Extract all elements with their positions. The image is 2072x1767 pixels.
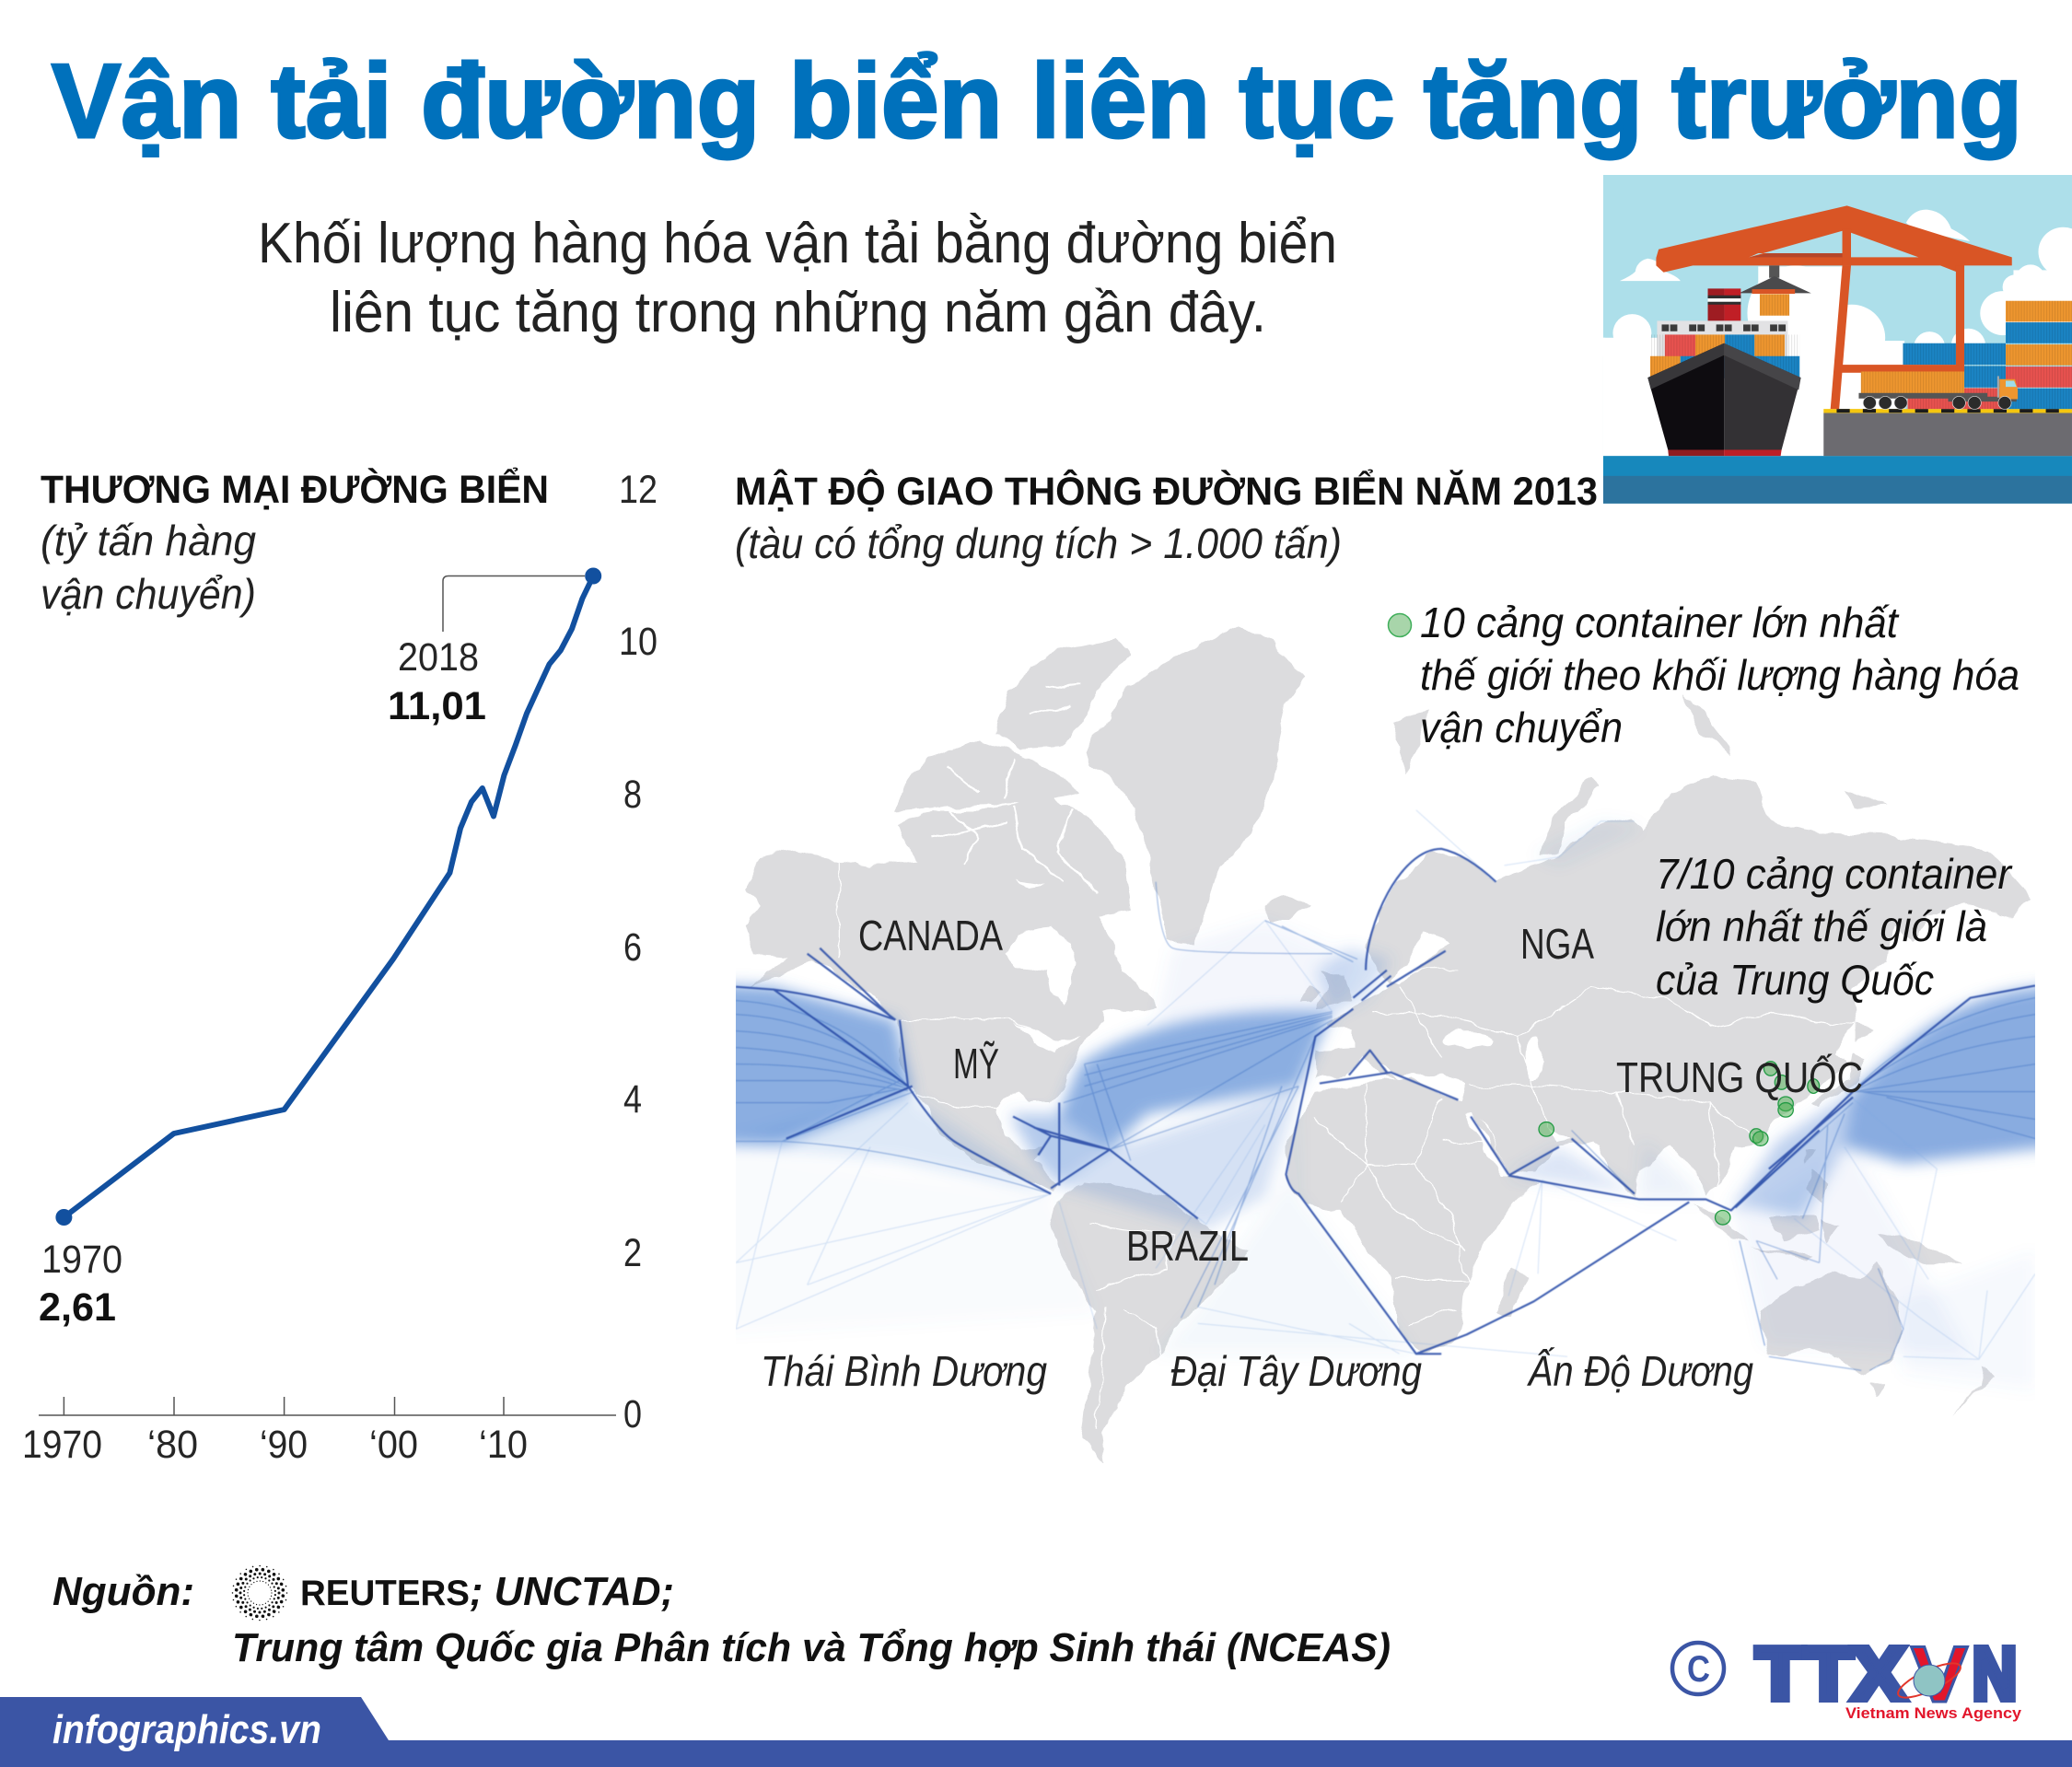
logo: TTXVN: V: [1911, 1631, 1968, 1719]
callout: China ports: lớn nhất thế giới là: [1656, 902, 1987, 950]
country labels: NGA: [1520, 920, 1594, 968]
icon: copyright: C: [1687, 1649, 1710, 1690]
y axis labels: 0: [623, 1392, 642, 1436]
callout: China ports: của Trung Quốc: [1656, 956, 1934, 1004]
subtitle: Khối lượng hàng hóa vận tải bằng đường biển: [258, 212, 1337, 275]
legend: top 10 ports: [1389, 599, 2020, 751]
source: ; UNCTAD;: [470, 1569, 674, 1614]
y axis labels: 12: [619, 468, 658, 512]
heading: sea trade chart: THƯƠNG MẠI ĐƯỜNG BIỂN: [41, 467, 549, 512]
legend: top 10 ports: thế giới theo khối lượng hàng hóa: [1420, 651, 2020, 699]
y axis labels: 10: [619, 620, 658, 664]
x axis labels: ‘00: [369, 1423, 418, 1467]
endpoint markers: [55, 567, 601, 1226]
y axis labels: 8: [623, 773, 642, 817]
x axis labels: ‘90: [260, 1423, 308, 1467]
x axis labels: 1970: [22, 1423, 102, 1467]
ship: [1647, 288, 1801, 456]
subtitle: [258, 212, 1337, 344]
chart subtitle: [41, 517, 256, 618]
ocean labels: Đại Tây Dương: [1170, 1347, 1422, 1395]
legend: top 10 ports: 10 cảng container lớn nhất: [1420, 599, 1900, 646]
legend: top 10 ports: vận chuyển: [1420, 703, 1623, 751]
label 1970: 1970: [41, 1238, 122, 1282]
footer site label: infographics.vn: [52, 1707, 321, 1752]
world map with shipping routes: [711, 625, 2055, 1464]
ocean labels: Thái Bình Dương: [761, 1347, 1047, 1395]
logo: TTXVN: TTX: [1756, 1633, 1905, 1715]
title: Vận tải đường biển liên tục tăng trưởng: [52, 43, 2022, 160]
pale routes: [736, 810, 2035, 1359]
density fans: [711, 821, 2055, 1389]
y axis labels: 4: [623, 1077, 642, 1122]
x axis labels: [22, 1423, 528, 1467]
icon: copyright: [1672, 1643, 1724, 1694]
source: Trung tâm Quốc gia Phân tích và Tổng hợp Sinh thái (NCEAS): [232, 1625, 1391, 1670]
source: [52, 1565, 1391, 1670]
logo: TTXVN: N: [1973, 1633, 2017, 1715]
label 2018: 11,01: [388, 684, 486, 728]
label 2018: [388, 635, 486, 728]
inland water: [1005, 926, 1572, 1174]
subtitle: liên tục tăng trong những năm gần đây.: [330, 281, 1266, 344]
country labels: [858, 912, 1863, 1270]
shipping routes: [736, 810, 2035, 1370]
leader line 2018: [443, 576, 585, 632]
country labels: CANADA: [858, 912, 1003, 959]
data line: [64, 576, 593, 1217]
container stacks: [1903, 301, 2072, 409]
chart subtitle: (tỷ tấn hàng: [41, 517, 256, 564]
callout: China ports: 7/10 cảng container: [1656, 850, 2013, 898]
x axis: [39, 1397, 616, 1415]
logo: TTXVN: Vietnam News Agency: [1845, 1704, 2022, 1722]
logo: TTXVN: [1672, 1631, 2022, 1722]
map subtitle: (tàu có tổng dung tích > 1.000 tấn): [735, 519, 1342, 567]
ocean labels: [761, 1347, 1753, 1395]
source: Nguồn:: [52, 1569, 194, 1614]
x axis labels: ‘10: [479, 1423, 528, 1467]
source: REUTERS: [300, 1574, 470, 1613]
callout: China ports: [1656, 850, 2013, 1004]
crane spreader and hanging container: [1739, 265, 1811, 316]
ocean labels: Ấn Độ Dương: [1526, 1347, 1753, 1395]
label 1970: [39, 1238, 122, 1330]
truck: [1858, 371, 2018, 409]
heading: shipping density map: MẬT ĐỘ GIAO THÔNG ĐƯỜNG BIỂN NĂM 2013: [735, 469, 1598, 514]
label 1970: 2,61: [39, 1285, 116, 1330]
label 2018: 2018: [398, 635, 479, 680]
medium routes: [736, 882, 2035, 1370]
icon: reuters logo: [232, 1565, 287, 1621]
main routes: [736, 849, 2035, 1354]
ports: top 10 container ports: [1539, 1062, 1820, 1225]
x axis labels: ‘80: [147, 1423, 198, 1467]
y axis labels: [619, 468, 658, 1436]
land masses: [744, 625, 2033, 1464]
y axis labels: 2: [623, 1231, 642, 1275]
arctic channels: [929, 683, 1097, 893]
chart subtitle: vận chuyển): [41, 570, 256, 618]
line chart: [22, 468, 658, 1467]
footer band: [0, 1697, 2072, 1767]
country labels: TRUNG QUỐC: [1616, 1053, 1863, 1101]
illustration: container port: [1595, 175, 2072, 504]
y axis labels: 6: [623, 925, 642, 970]
country labels: BRAZIL: [1126, 1222, 1249, 1270]
crane: [1656, 205, 2012, 409]
country labels: MỸ: [953, 1040, 999, 1087]
country borders: [839, 863, 1857, 1428]
